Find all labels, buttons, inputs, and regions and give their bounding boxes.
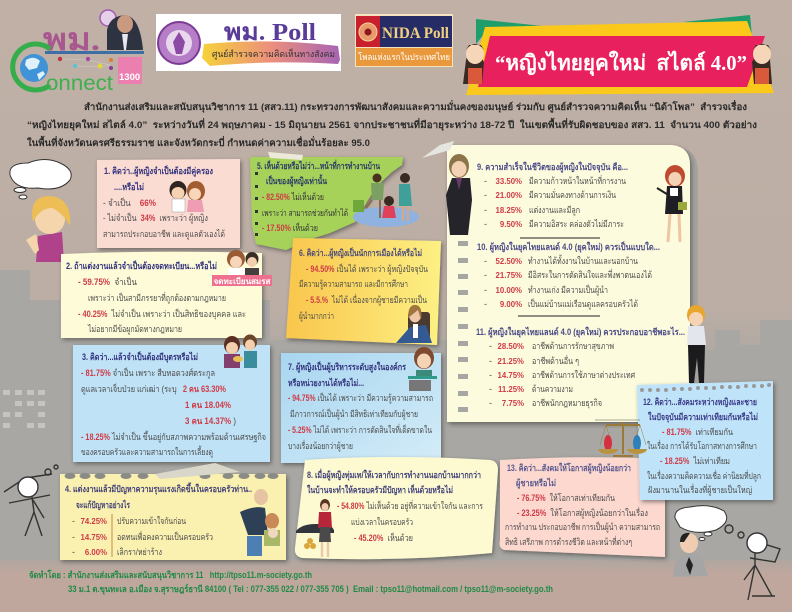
icon: thinking man with cloud [673, 506, 727, 577]
panel 12: ในเรื่อง การได้รับโอกาสทางการศึกษา [647, 439, 757, 451]
icon: red-haired presenter [657, 165, 687, 242]
panel 4: 6.00% [85, 548, 107, 557]
logo: NIDA Poll [355, 14, 453, 67]
question 9: มีความอิสระ คล่องตัวไม่มีภาระ [529, 219, 624, 229]
question 9: แต่งงานและมีลูก [529, 205, 580, 216]
footer credits: จัดทำโดย : สำนักงานส่งเสริมและสนับสนุนวิชาการ 11 http://tpso11.m-society.go.th [29, 569, 312, 581]
panel 5: เป็นของผู้หญิงเท่านั้น [266, 174, 328, 187]
question 10: ทำงานเก่ง มีความเป็นผู้นำ [528, 283, 608, 296]
icon: woman, car and coins [296, 499, 334, 557]
intro text: สำนักงานส่งเสริมและสนับสนุนวิชาการ 11 (สสว.11) กระทรวงการพัฒนาสังคมและความมั่นคงของมนุษย์ ร่วมกับ ศูนย์สำรวจความคิดเห็น “นิด้าโพล” สำรวจเรื่อง [84, 99, 747, 114]
panel 6: มีความรู้ความสามารถ และมีการศึกษา [299, 279, 408, 290]
logo: พม. Connect: 1300 [119, 72, 140, 83]
icon: Thai lady left [463, 44, 484, 84]
panel 8: - 45.20% เห็นด้วย [354, 531, 413, 543]
panel 1: 1. คิดว่า..ผู้หญิงจำเป็นต้องมีคู่ครอง [104, 164, 213, 177]
icon: stick figure with telescope left [4, 465, 58, 536]
question 11: - [489, 398, 492, 408]
logo: พม. Poll: พม. Poll [224, 20, 316, 46]
question 10: ทำงานได้ทั้งงานในบ้านและนอกบ้าน [528, 254, 638, 266]
panel 2: เพราะว่า เป็นสามีภรรยาที่ถูกต้องตามกฎหมาย [88, 291, 226, 304]
question 9: - [484, 205, 487, 215]
panel 3: 3. คิดว่า...แล้วจำเป็นต้องมีบุตรหรือไม่ [82, 350, 198, 363]
question 11: - [489, 341, 492, 351]
panel 5: - 82.50% ไม่เห็นด้วย [262, 190, 324, 202]
logo: พม. Poll [156, 14, 341, 71]
panel 1: - ไม่จำเป็น 34% เพราะว่า ผู้หญิง [103, 211, 208, 224]
question 10: 10. ผู้หญิงในยุคไทยแลนด์ 4.0 (ยุคใหม่) ควรเป็นแบบใด... [477, 240, 660, 253]
panel 2 [61, 250, 272, 338]
panel 13: - 76.75% ให้โอกาสเท่าเทียมกัน [517, 493, 615, 503]
panel 3: 3 คน 14.37% ) [185, 416, 236, 426]
panel 4: - [72, 516, 75, 526]
panel 3: - 18.25% ไม่จำเป็น ขึ้นอยู่กับสภาพความพร้อมด้านเศรษฐกิจ [81, 430, 266, 443]
icon: stick figure with telescope right [725, 525, 780, 600]
panel 8: 8. เมื่อผู้หญิงทุ่มเท/ให้เวลากับการทำงานนอกบ้านมากกว่า [307, 468, 481, 481]
panel 12: ฝังมานานในเรื่องที่ผู้ชายเป็นใหญ่ [648, 483, 752, 496]
question 9: มีความมั่นคงทางด้านการเงิน [529, 188, 616, 200]
panel 5: 5. เห็นด้วยหรือไม่ว่า...หน้าที่การทำงานบ้าน [257, 159, 381, 171]
question 11: อาชีพด้านการรักษาสุขภาพ [532, 341, 614, 352]
question 10: - [484, 285, 487, 295]
logo: NIDA Poll: NIDA Poll [382, 25, 450, 42]
panel 1: ....หรือไม่ [114, 181, 144, 192]
logo: พม. Connect [13, 10, 144, 95]
panel 4 [60, 463, 286, 560]
question 10: - [484, 299, 487, 309]
title banner: “หญิงไทยยุคใหม่ สไตล์ 4.0” [495, 50, 747, 77]
panel 4: อดทนเพื่อคงความเป็นครอบครัว [117, 530, 213, 542]
panel 7 [281, 347, 441, 463]
panel 12 [637, 381, 773, 500]
panel 3: ของครอบครัวและความสามารถในการเลี้ยงดู [81, 445, 213, 458]
footer credits: 33 ม.1 ต.ขุนทะเล อ.เมือง จ.สุราษฎร์ธานี 84100 ( Tel : 077-355 022 / 077-355 705 ) Email : tpso11@hotmail.com / tpso11@m-society.go.th [68, 583, 553, 595]
panel 13: 13. คิดว่า...สังคมให้โอกาสผู้หญิงน้อยกว่า [507, 462, 631, 474]
panel 13 [500, 457, 665, 557]
question 11: อาชีพด้านการใช้ภาษาต่างประเทศ [532, 370, 635, 380]
panel 3: - 81.75% จำเป็น เพราะ สืบทอดวงศ์ตระกูล [81, 366, 215, 379]
panel 8: - 54.80% ไม่เห็นด้วย อยู่ที่ความเข้าใจกัน และการ [337, 499, 483, 512]
panel 6: - 5.5.% ไม่ได้ เนื่องจากผู้ชายมีความเป็น [306, 293, 427, 306]
panel 13: - 23.25% ให้โอกาสผู้หญิงน้อยกว่าในเรื่อง [517, 506, 648, 519]
icon: bride and groom banner [212, 250, 272, 286]
question 9: 21.00% [496, 191, 522, 200]
question 9: 9.50% [500, 220, 522, 229]
panel 7: หรือหน่วยงานได้หรือไม่... [288, 377, 364, 388]
question 9: - [484, 219, 487, 229]
icon: couple with baby [224, 334, 257, 368]
question 11: 28.50% [498, 342, 524, 351]
question 10: 9.00% [500, 300, 522, 309]
icon: scales [595, 420, 647, 456]
question 11: - [489, 384, 492, 394]
panel 8: แบ่งเวลาในครอบครัว [351, 517, 413, 527]
icon: businesswoman in black suit [446, 154, 472, 235]
intro text: ในพื้นที่จังหวัดนครศรีธรรมราช และจังหวัดกระบี่ กำหนดค่าความเชื่อมั่นร้อยละ 95.0 [27, 135, 370, 149]
question 9: มีความก้าวหน้าในหน้าที่การงาน [529, 174, 626, 186]
question 9: 33.50% [496, 177, 522, 186]
panel 12: - 81.75% เท่าเทียมกัน [662, 427, 733, 437]
logo: พม. Poll: ศูนย์สำรวจความคิดเห็นทางสังคม [212, 47, 335, 60]
icon: businesswoman at desk [396, 305, 432, 343]
icon: family doing housework [353, 173, 419, 227]
panel 4: จะแก้ปัญหาอย่างไร [76, 499, 130, 511]
panel 5: - 17.50% เห็นด้วย [262, 221, 318, 233]
panel 7: บางเรื่องน้อยกว่าผู้ชาย [288, 439, 353, 452]
panel 6: ผู้นำมากกว่า [299, 311, 334, 322]
logo: NIDA Poll: โพลแห่งแรกในประเทศไทย [358, 52, 450, 62]
panel 4: 74.25% [81, 517, 107, 526]
icon: thinking woman [10, 160, 71, 262]
question 11: อาชีพนักกฎหมายธุรกิจ [532, 398, 602, 409]
question 9: 9. ความสำเร็จในชีวิตของผู้หญิงในปัจจุบัน คือ... [477, 160, 628, 173]
panel 4: - [72, 547, 75, 557]
icon: bride and groom banner: จดทะเบียนสมรส [214, 276, 270, 286]
question 10: - [484, 256, 487, 266]
panel 13: ผู้ชายหรือไม่ [516, 477, 556, 489]
panel 3: ดูแลเวลาเจ็บป่วย แก่เฒ่า (ระบุ 2 คน 63.30% [81, 382, 226, 395]
panel 7: - 94.75% เป็นได้ เพราะว่า มีความรู้ความสามารถ [288, 391, 433, 404]
panel 6 [286, 238, 441, 345]
panel 12: 12. คิดว่า...สังคมระหว่างหญิงและชาย [643, 397, 757, 408]
question 9: 18.25% [496, 206, 522, 215]
icon: woman executive [408, 347, 437, 391]
panel 4: - [72, 532, 75, 542]
question 11 [476, 326, 685, 409]
question 11: 7.75% [502, 399, 524, 408]
panel 12: ในปัจจุบันมีความเท่าเทียมกันหรือไม่ [648, 411, 758, 423]
panel 3 [73, 334, 270, 462]
panel 4: เลิกรา/หย่าร้าง [117, 547, 162, 557]
icon: Thai lady right [752, 44, 772, 84]
question 11: อาชีพด้านอื่น ๆ [532, 354, 579, 366]
panel 4: 14.75% [81, 533, 107, 542]
question 11: - [489, 356, 492, 366]
question 11: 21.25% [498, 357, 524, 366]
panel 9-11: large note [422, 141, 698, 428]
question 11: - [489, 370, 492, 380]
logo: พม. Connect: onnect [46, 72, 113, 95]
question 11: 11. ผู้หญิงในยุคไทยแลนด์ 4.0 (ยุคใหม่) ควรประกอบอาชีพอะไร... [476, 326, 685, 338]
question 10 [477, 240, 660, 310]
question 9: - [484, 190, 487, 200]
icon: family conflict [240, 489, 280, 556]
panel 1 [97, 159, 240, 248]
panel 13: สิทธิ เสรีภาพ การดำรงชีวิต และหน้าที่ต่างๆ [505, 535, 632, 547]
panel 6: 6. คิดว่า...ผู้หญิงเป็นนักการเมืองได้หรือไม่ [299, 246, 422, 259]
question 10: มีอิสระในการตัดสินใจและพึ่งพาตนเองได้ [528, 268, 652, 280]
intro text: “หญิงไทยยุคใหม่ สไตล์ 4.0” ระหว่างวันที่ 24 พฤษภาคม - 15 มิถุนายน 2561 จากประชาชนที่มีอายุระหว่าง 18-72 ปี ในเขตพื้นที่รับผิดชอบของ สสว. 11 จำนวน 400 ตัวอย่าง [27, 117, 757, 131]
footer credits [29, 569, 553, 595]
panel 3: 1 คน 18.04% [185, 400, 231, 410]
question 11: 14.75% [498, 371, 524, 380]
panel 1: สามารถประกอบอาชีพ และดูแลตัวเองได้ [103, 229, 225, 240]
panel 7: 7. ผู้หญิงเป็นผู้บริหารระดับสูงในองค์กร [288, 360, 406, 373]
panel 13: การทำงาน ประกอบอาชีพ การเป็นผู้นำ ความสามารถ [505, 520, 660, 533]
panel 6: - 94.50% เป็นได้ เพราะว่า ผู้หญิงปัจจุบัน [306, 262, 428, 275]
panel 2: - 40.25% ไม่จำเป็น เพราะว่า เป็นสิทธิของบุคคล และ [78, 307, 246, 320]
question 11: ด้านความงาม [532, 384, 573, 394]
panel 8: ในบ้านจะทำให้ครอบครัวมีปัญหา เห็นด้วยหรือไม่ [307, 483, 453, 496]
title banner [463, 15, 774, 95]
question 9 [477, 160, 628, 229]
panel 2: 2. ถ้าแต่งงานแล้วจำเป็นต้องจดทะเบียน...หรือไม่ [66, 259, 217, 271]
panel 2: ไม่อยากมีข้อผูกมัดทางกฎหมาย [87, 324, 182, 335]
icon: couple [170, 181, 205, 212]
question 10: 52.50% [496, 257, 522, 266]
panel 5 [250, 152, 419, 250]
panel 12: - 18.25% ไม่เท่าเทียม [660, 456, 730, 466]
icon: blonde woman with glasses [687, 305, 706, 383]
panel 1: - จำเป็น 66% [103, 196, 156, 208]
panel 8 [295, 457, 498, 559]
panel 4: ปรับความเข้าใจกันก่อน [117, 516, 186, 526]
panel 7: มีภาวการณ์เป็นผู้นำ มีสิทธิเท่าเทียมกับผู้ชาย [290, 407, 418, 420]
question 10: - [484, 270, 487, 280]
question 10: 10.00% [496, 286, 522, 295]
question 11: 11.25% [498, 385, 524, 394]
logo: พม. Connect: พม. [43, 22, 100, 57]
question 10: เป็นแม่บ้านแม่เรือนดูแลครอบครัวได้ [528, 297, 638, 310]
panel 4: 4. แต่งงานแล้วมีปัญหาความรุนแรงเกิดขึ้นในครอบครัวท่าน.. [65, 482, 252, 495]
question 10: 21.75% [496, 271, 522, 280]
intro text [27, 99, 757, 149]
panel 7: - 5.25% ไม่ได้ เพราะว่า การตัดสินใจที่เด็ดขาดใน [288, 423, 432, 435]
panel 5: เพราะว่า สามารถช่วยกันทำได้ [262, 208, 348, 218]
question 9: - [484, 176, 487, 186]
panel 2: - 59.75% จำเป็น [78, 275, 137, 287]
